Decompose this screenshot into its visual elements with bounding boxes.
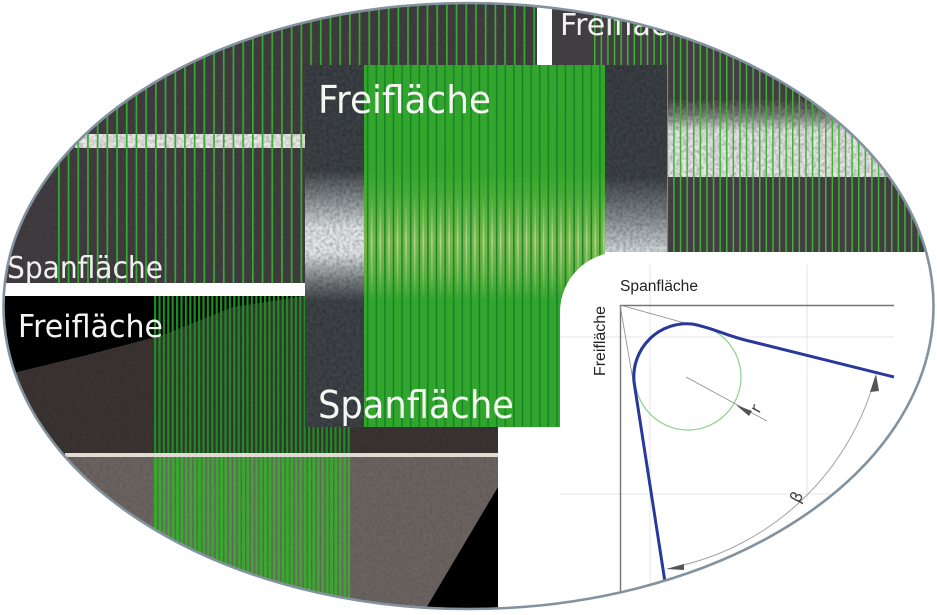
label: Freifläche, center: Freifläche [318, 78, 491, 122]
panel: top-left photo [0, 0, 537, 283]
panel: bottom-left photo [0, 296, 498, 615]
label: Spanfläche, top left: Spanfläche [7, 251, 163, 286]
angle arc beta [666, 374, 879, 570]
grid lines [560, 265, 894, 592]
blue edge profile [634, 324, 894, 582]
label: Spanfläche, center: Spanfläche [318, 383, 514, 427]
axes [620, 306, 894, 600]
label: Freifläche, top right: Freifläche [560, 8, 705, 43]
panel: top-right photo [552, 0, 937, 252]
label: Freifläche, diagram: Freifläche [592, 306, 609, 376]
panel: geometry diagram [560, 254, 894, 592]
angle arc beta: β [786, 488, 807, 506]
panel: center photo with green overlay [305, 65, 667, 427]
circle: nose radius [635, 324, 741, 430]
label: Spanfläche, diagram: Spanfläche [620, 278, 698, 295]
radius marker: r [746, 401, 766, 416]
tangent construction lines [620, 304, 684, 379]
white gap bars [0, 0, 552, 296]
radius marker [686, 377, 767, 421]
label: Freifläche, bottom left: Freifläche [18, 309, 163, 345]
